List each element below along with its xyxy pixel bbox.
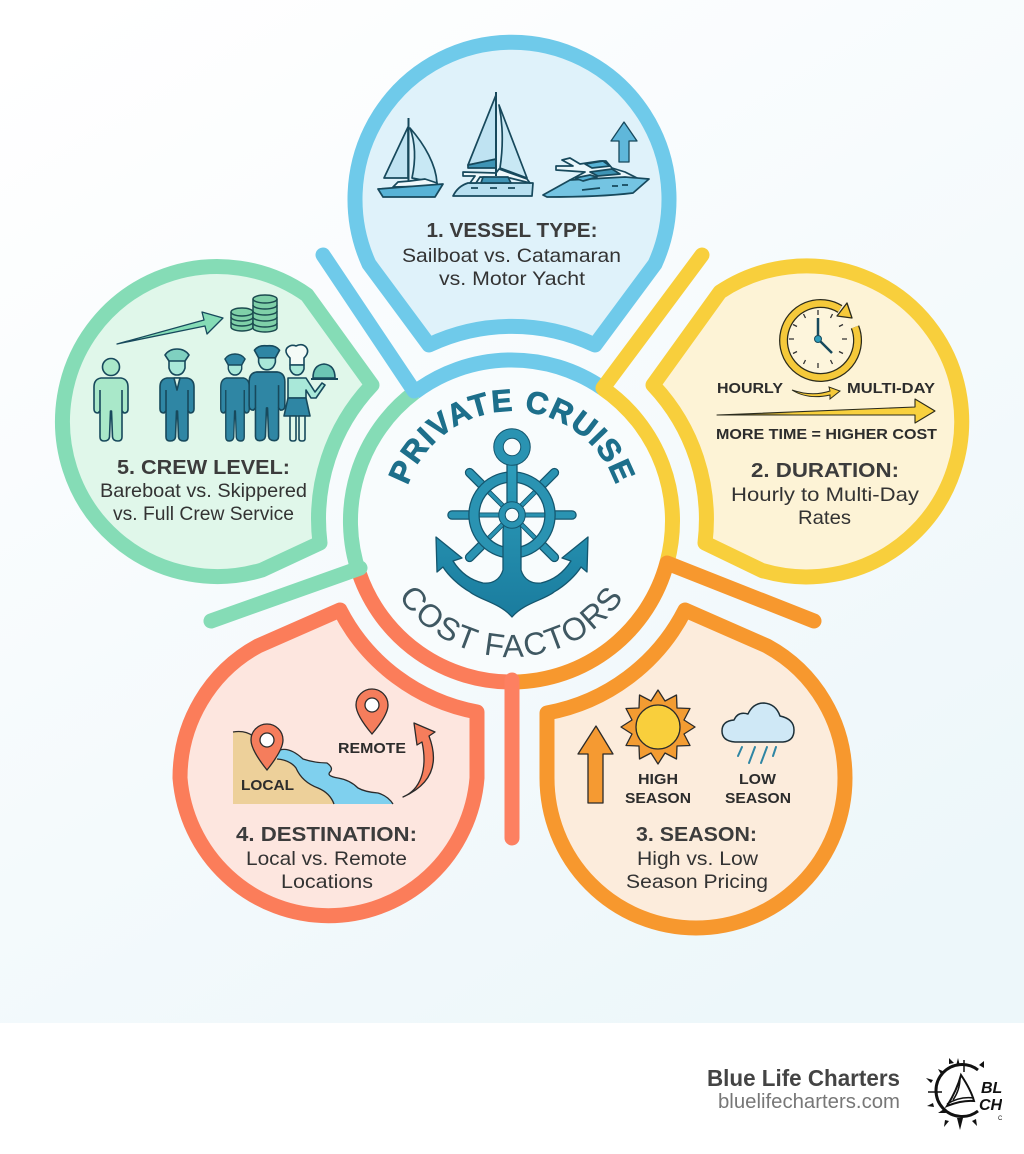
footer: brand name: Blue Life Charters [707, 1065, 900, 1091]
label: local: LOCAL [241, 777, 294, 794]
text: vessel type line 2: vs. Motor Yacht [439, 268, 586, 290]
label: low season: SEASON [725, 790, 791, 807]
footer: logo [926, 1058, 1002, 1130]
arrow: local to remote [403, 723, 435, 797]
text: season line 2: Season Pricing [626, 871, 768, 893]
petal shape: duration [653, 266, 962, 577]
panel: 1 vessel type [355, 42, 669, 345]
icon: catamaran [453, 92, 533, 196]
petal shape: vessel type [355, 42, 669, 345]
icon: up arrow [611, 122, 637, 162]
hub disc [356, 366, 666, 676]
heading: crew level: 5. CREW LEVEL: [117, 457, 290, 479]
icon: land and water map [233, 732, 393, 804]
subtitle: cost factors: COST FACTORS [402, 588, 620, 658]
heading: destination: 4. DESTINATION: [236, 824, 417, 846]
icon: sun [621, 690, 695, 764]
label: more time equals higher cost: MORE TIME = HIGHER COST [716, 426, 937, 443]
text: crew level line 1: Bareboat vs. Skippered [100, 480, 307, 502]
panel: 2 duration [653, 266, 962, 577]
heading: vessel type: 1. VESSEL TYPE: [426, 220, 598, 242]
label: multi-day: MULTI-DAY [847, 380, 935, 397]
footer: logo: C [998, 1116, 1003, 1122]
text: destination line 1: Local vs. Remote [246, 848, 407, 870]
text: vessel type line 1: Sailboat vs. Catamaran [402, 245, 621, 267]
footer: website: bluelifecharters.com [718, 1091, 900, 1113]
icon: rain [738, 747, 776, 763]
icon: sailboat [378, 118, 443, 197]
arrow: more time [717, 399, 935, 423]
icon: local pin [251, 724, 283, 770]
arrow: rising cost [117, 312, 223, 344]
heading: season: 3. SEASON: [636, 824, 757, 846]
panel: 3 season [547, 610, 845, 928]
label: high: HIGH [638, 771, 678, 788]
petal shape: crew level [62, 267, 372, 577]
text: duration line 1: Hourly to Multi-Day [731, 484, 919, 506]
footer band [0, 1023, 1024, 1154]
text: duration line 2: Rates [798, 507, 851, 529]
panel: 5 crew level [62, 267, 372, 577]
icon: full crew officer 1 [221, 354, 249, 441]
text: destination line 2: Locations [281, 871, 373, 893]
footer: logo: BLUE [981, 1080, 1024, 1097]
icon: up arrow [578, 726, 613, 803]
icon: coin stacks [231, 295, 277, 332]
label: low: LOW [739, 771, 777, 788]
heading: duration: 2. DURATION: [751, 460, 899, 482]
icon: anchor and helm [436, 434, 588, 617]
hub ring and connector arms [211, 255, 814, 838]
arrow: hourly to multi-day [792, 387, 840, 399]
label: remote: REMOTE [338, 740, 406, 757]
icon: cloud [722, 703, 794, 742]
petal shape: season [547, 610, 845, 928]
icon: bareboat person [94, 358, 128, 441]
label: high season: SEASON [625, 790, 691, 807]
text: season line 1: High vs. Low [637, 848, 759, 870]
icon: motor yacht [543, 158, 649, 197]
panel: 4 destination [180, 610, 477, 916]
text: crew level line 2: vs. Full Crew Service [113, 503, 294, 525]
petal shape: destination [180, 610, 477, 916]
center hub [204, 248, 822, 846]
label: hourly: HOURLY [717, 380, 783, 397]
icon: full crew officer 2 [249, 346, 285, 441]
icon: remote pin [356, 689, 388, 734]
icon: full crew chef [284, 345, 338, 441]
icon: skipper [160, 349, 194, 441]
title: private cruise: PRIVATE CRUISE [388, 389, 636, 484]
icon: clock [783, 303, 858, 377]
